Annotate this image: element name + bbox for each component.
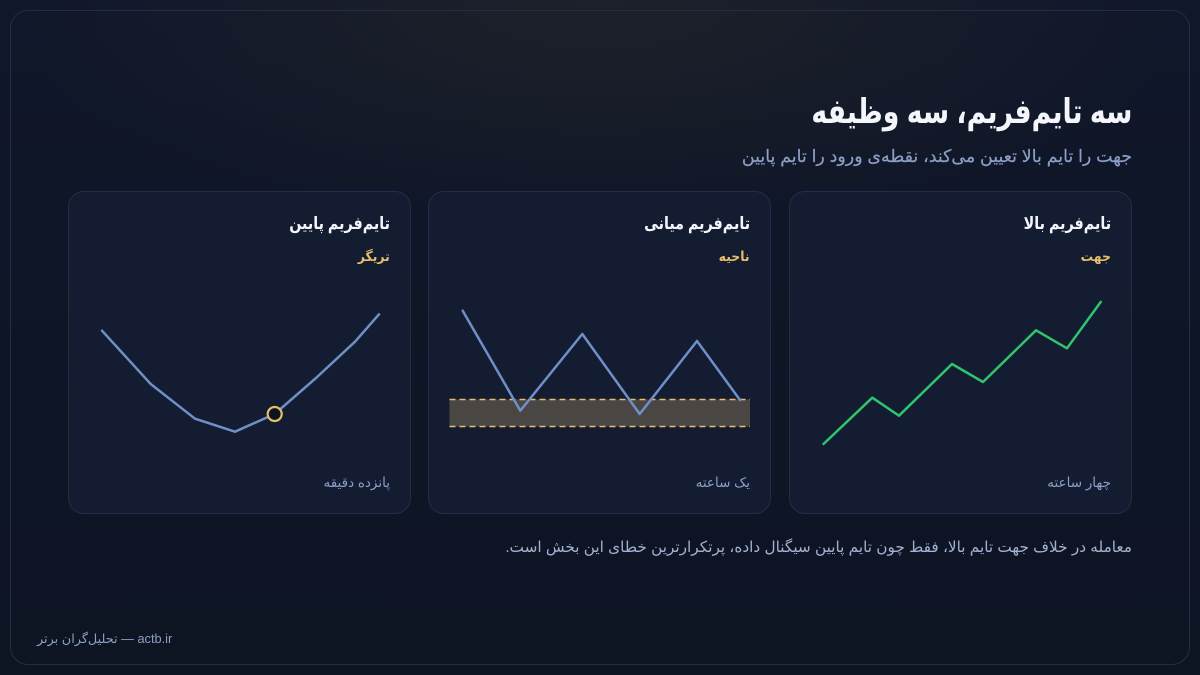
subtitle: جهت را تایم بالا تعیین می‌کند، نقطه‌ی ورود را تایم پایین [742,146,1132,166]
chart: rounded bottom with trigger point [102,314,379,432]
role label: zone: ناحیه [719,249,750,264]
caption: four hours: چهار ساعته [1047,475,1111,490]
caption: fifteen minutes: پانزده دقیقه [323,475,390,490]
chart: zone band with price line [450,311,750,426]
chart: uptrend line [824,302,1101,444]
heading: middle timeframe: تایم‌فریم میانی [644,214,750,233]
note text: معامله در خلاف جهت تایم بالا، فقط چون تایم پایین سیگنال داده، پرتکرارترین خطای این بخش است. [505,539,1132,556]
caption: one hour: یک ساعته [696,475,750,490]
heading: lower timeframe: تایم‌فریم پایین [289,214,390,233]
heading: higher timeframe: تایم‌فریم بالا [1024,214,1111,233]
title: سه تایم‌فریم، سه وظیفه [811,93,1132,131]
role label: trigger: تریگر [358,249,390,264]
panel: lower timeframe [68,191,411,514]
panel: middle timeframe [428,191,771,514]
panel: higher timeframe [789,191,1132,514]
footer brand: تحلیل‌گران برتر — actb.ir [37,631,172,646]
role label: direction: جهت [1081,249,1111,264]
